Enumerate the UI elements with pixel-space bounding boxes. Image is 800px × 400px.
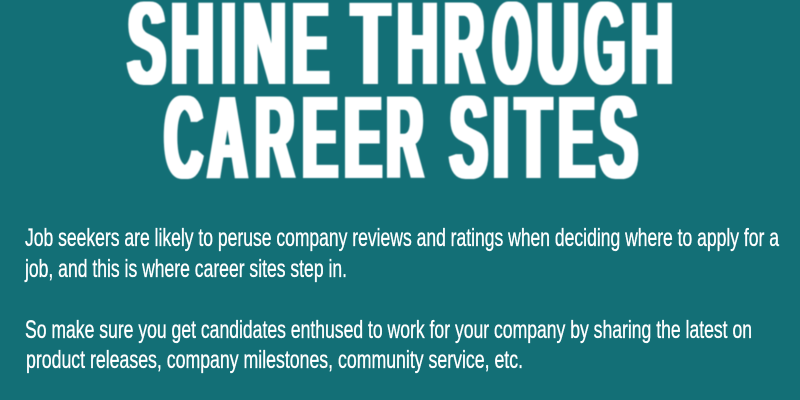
text block: job seekers paragraph <box>24 224 779 283</box>
title: E <box>558 72 595 204</box>
title: R <box>387 72 423 204</box>
text block: candidates paragraph: product releases, company milestones, community service, etc. <box>26 346 523 374</box>
title: I <box>493 72 509 204</box>
text block: job seekers paragraph: job, and this is where career sites step in. <box>24 255 347 283</box>
title: R <box>255 72 294 204</box>
title: T <box>516 72 551 204</box>
title: E <box>344 72 382 204</box>
title: E <box>302 72 338 204</box>
title: S <box>600 72 638 204</box>
title: A <box>208 72 247 204</box>
title <box>128 0 673 204</box>
title: S <box>450 72 488 204</box>
text block: candidates paragraph <box>25 316 752 374</box>
title: C <box>165 72 202 204</box>
